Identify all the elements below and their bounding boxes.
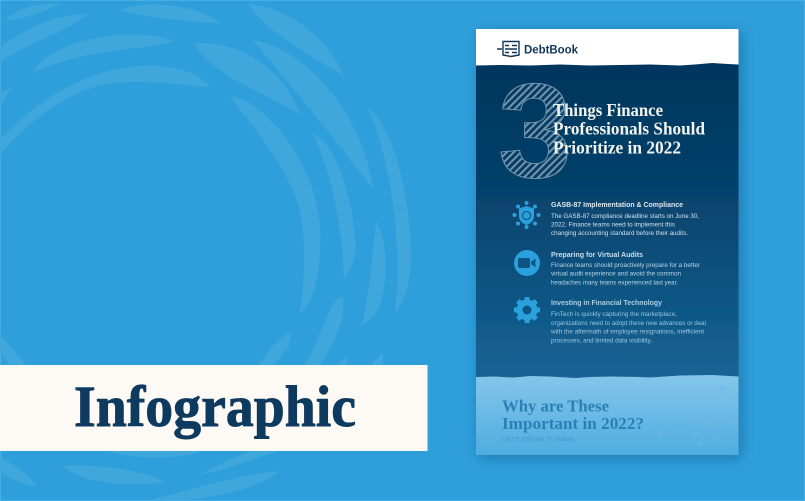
banner	[0, 365, 428, 451]
item: financial technology	[514, 297, 707, 344]
card title: Things Finance	[553, 100, 663, 120]
body text: The GASB-87 compliance deadline starts on June 30,	[551, 213, 699, 220]
icon: DebtBook logo	[497, 42, 519, 56]
bottom heading: Why are These	[502, 396, 609, 416]
icon: shield with dots	[512, 201, 540, 229]
item: virtual audits	[514, 250, 701, 286]
icon: video camera	[514, 250, 540, 276]
bottom heading	[502, 396, 644, 433]
body text	[550, 311, 707, 344]
body text	[551, 262, 701, 286]
body text: changing accounting standard before their audits.	[551, 230, 688, 237]
logo wordmark: DebtBook	[524, 44, 579, 56]
bottom heading: Important in 2022?	[502, 414, 644, 433]
body text: processes, and limited data visibility.	[551, 338, 652, 344]
body text: headaches many teams experienced last year.	[551, 280, 678, 286]
header strip	[476, 29, 738, 66]
body text	[551, 213, 699, 237]
body text: FinTech is quickly capturing the marketplace,	[551, 311, 677, 318]
card title: Prioritize in 2022	[553, 138, 681, 158]
faint decorative dots	[657, 385, 737, 446]
banner title: Infographic	[74, 374, 356, 439]
icon: gear	[514, 297, 540, 323]
decorative brush strokes	[0, 4, 411, 500]
body text: 2022. Finance teams need to implement this	[551, 222, 676, 228]
body text: with the aftermath of employee resignations, inefficient	[550, 328, 704, 336]
heading: Investing in Financial Technology	[551, 298, 663, 307]
light torn panel	[476, 375, 738, 455]
card shadow and dark body	[476, 29, 738, 455]
body text: virtual audit experience and avoid the common	[551, 270, 681, 278]
bottom section	[476, 375, 738, 455]
heading: Preparing for Virtual Audits	[551, 250, 643, 259]
bottom subheading: LET'S BREAK IT DOWN.	[502, 436, 576, 444]
card title	[553, 100, 705, 158]
large hatched numeral 3: 3	[498, 57, 572, 206]
item: GASB-87	[512, 200, 699, 237]
heading: GASB-87 Implementation & Compliance	[551, 200, 683, 209]
panel: infographic preview card	[476, 29, 738, 455]
card title: Professionals Should	[553, 118, 705, 138]
body text: organizations need to adopt these new advances or deal	[551, 320, 707, 327]
body text: Finance teams should proactively prepare for a better	[551, 262, 701, 269]
